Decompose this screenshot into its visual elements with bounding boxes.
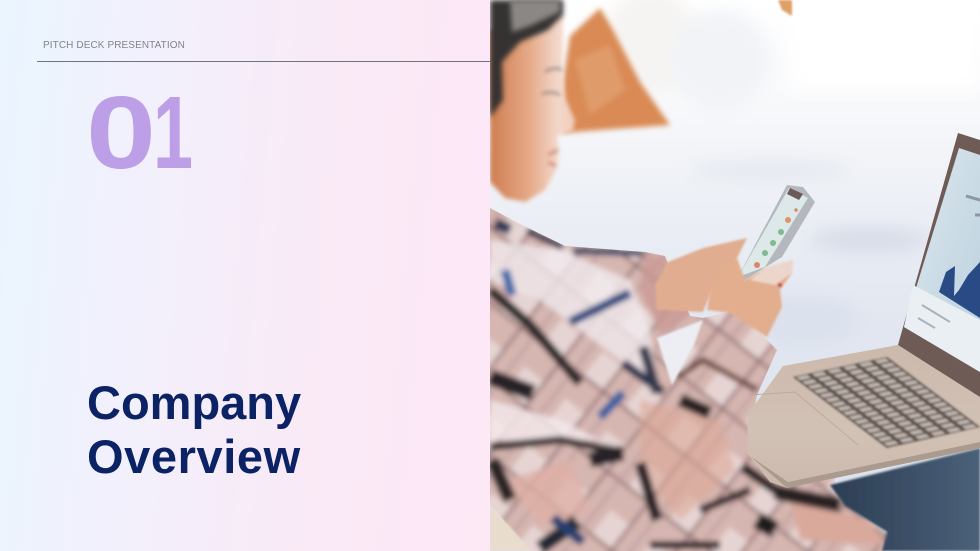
front hand [707, 258, 793, 337]
keyboard [793, 357, 980, 448]
phone screen [738, 188, 808, 277]
plaid shirt [480, 200, 900, 551]
laptop lid and screen [898, 133, 980, 398]
header rule [37, 61, 490, 62]
title: Overview [87, 430, 301, 483]
section number [86, 75, 193, 180]
laptop base [747, 345, 980, 488]
photo: woman on bed with phone and laptop [490, 0, 980, 551]
phone notch [787, 188, 803, 200]
face [490, 15, 575, 202]
beige seat corner [490, 505, 532, 551]
title [87, 376, 301, 483]
bright blurred window area [605, 0, 980, 345]
bed background [490, 0, 980, 551]
section label: PITCH DECK PRESENTATION [43, 40, 185, 51]
trackpad edge [750, 392, 858, 445]
gap between arm and body [657, 320, 703, 385]
jeans [830, 448, 980, 551]
phone [738, 185, 815, 280]
laptop [747, 133, 980, 488]
laptop chart [939, 262, 980, 318]
orange pillow corner [778, 0, 792, 16]
title: Company [87, 376, 301, 429]
phone app dots [754, 208, 798, 268]
hair highlight [510, 0, 560, 32]
laptop front edge [750, 442, 980, 488]
hair [490, 0, 563, 118]
orange pillow [560, 8, 670, 133]
back hand [655, 238, 747, 312]
phone body [738, 185, 815, 280]
panel: left gradient background [0, 0, 490, 551]
